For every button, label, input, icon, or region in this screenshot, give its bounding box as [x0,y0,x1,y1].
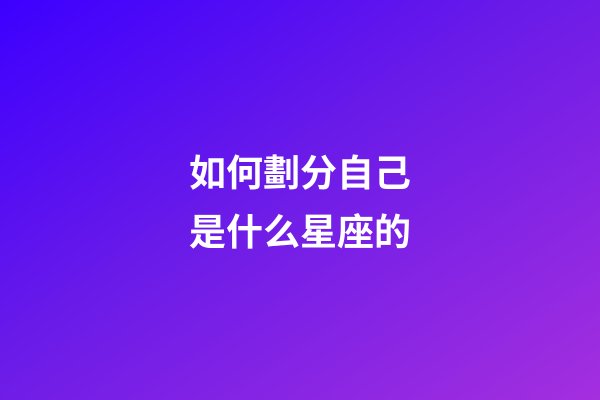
title line 2: 是什么星座的 [189,212,411,253]
title [189,153,411,253]
title line 1: 如何劃分自己 [189,153,411,194]
